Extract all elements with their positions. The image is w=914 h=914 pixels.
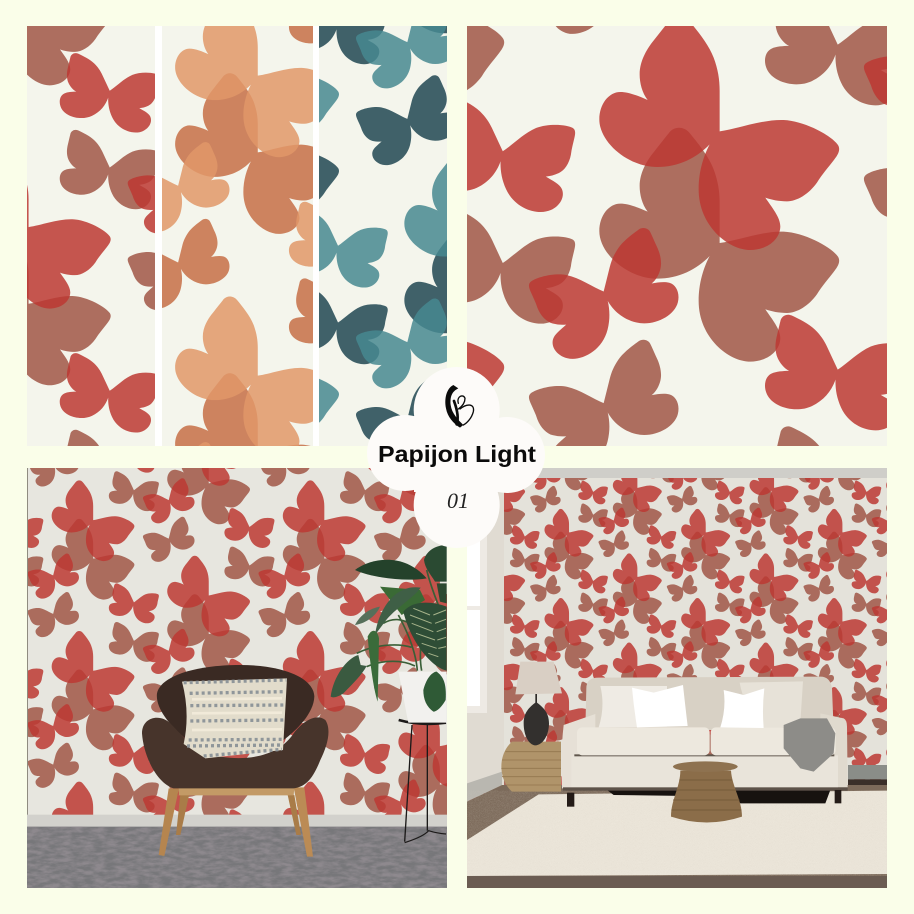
icon: brush logo (445, 385, 474, 428)
panel: three colourway pattern swatches (27, 26, 447, 446)
plant stand (399, 720, 446, 843)
baseboard (27, 815, 447, 827)
table lamp (515, 662, 562, 745)
badge: quatrefoil title card (367, 367, 545, 548)
sofa shadow (607, 790, 830, 803)
left wall (467, 468, 504, 793)
title: Papijon Light (378, 441, 536, 467)
armchair (142, 665, 328, 857)
carpet (27, 827, 447, 890)
side pouf (501, 742, 561, 792)
swatch: orange butterflies (162, 26, 313, 446)
plant pot (398, 672, 447, 723)
panel: armchair room mockup (27, 468, 447, 888)
panel: sofa room mockup (467, 468, 887, 888)
baseboards and floor (467, 765, 887, 888)
pillow (182, 678, 287, 758)
rug (467, 791, 887, 876)
plant (331, 545, 447, 723)
ceiling strip (467, 468, 887, 478)
wallpaper (0, 28, 712, 914)
swatch: teal butterflies (319, 26, 447, 446)
sofa pillows (599, 681, 803, 728)
window (467, 470, 487, 713)
grey throw (784, 718, 835, 772)
coffee table (671, 761, 742, 822)
number: 01 (447, 488, 469, 513)
sofa (561, 677, 848, 807)
panel: enlarged butterfly pattern (467, 26, 887, 446)
striped leaf (403, 603, 447, 671)
swatch: red and brown butterflies (27, 26, 155, 446)
wallpaper (300, 242, 914, 914)
